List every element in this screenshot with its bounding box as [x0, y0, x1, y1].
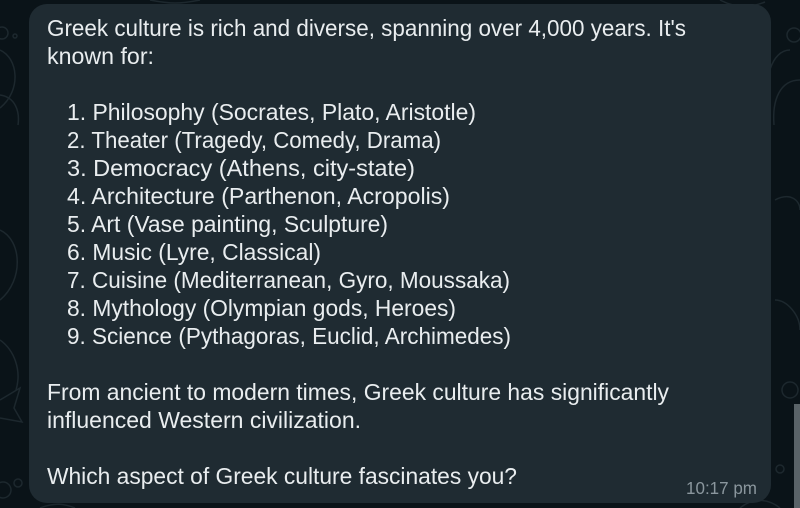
numbered list: 8. Mythology (Olympian gods, Heroes) [67, 295, 456, 321]
numbered list: 2. Theater (Tragedy, Comedy, Drama) [67, 127, 441, 153]
closing text [47, 379, 669, 433]
numbered list [67, 99, 511, 349]
numbered list: 7. Cuisine (Mediterranean, Gyro, Moussaka) [67, 267, 510, 293]
question text: Which aspect of Greek culture fascinates you? [47, 463, 517, 489]
numbered list: 4. Architecture (Parthenon, Acropolis) [67, 183, 450, 209]
intro text: known for: [47, 43, 154, 69]
closing text: influenced Western civilization. [47, 407, 361, 433]
numbered list: 9. Science (Pythagoras, Euclid, Archimedes) [67, 323, 511, 349]
intro text: Greek culture is rich and diverse, spanning over 4,000 years. It's [47, 15, 686, 41]
numbered list: 6. Music (Lyre, Classical) [67, 239, 321, 265]
numbered list: 3. Democracy (Athens, city-state) [67, 155, 415, 181]
intro text [47, 15, 686, 69]
timestamp: 10:17 pm [686, 478, 757, 498]
closing text: From ancient to modern times, Greek culture has significantly [47, 379, 669, 405]
scrollbar [794, 404, 800, 508]
numbered list: 5. Art (Vase painting, Sculpture) [67, 211, 388, 237]
message text [47, 15, 686, 489]
numbered list: 1. Philosophy (Socrates, Plato, Aristotle) [67, 99, 476, 125]
